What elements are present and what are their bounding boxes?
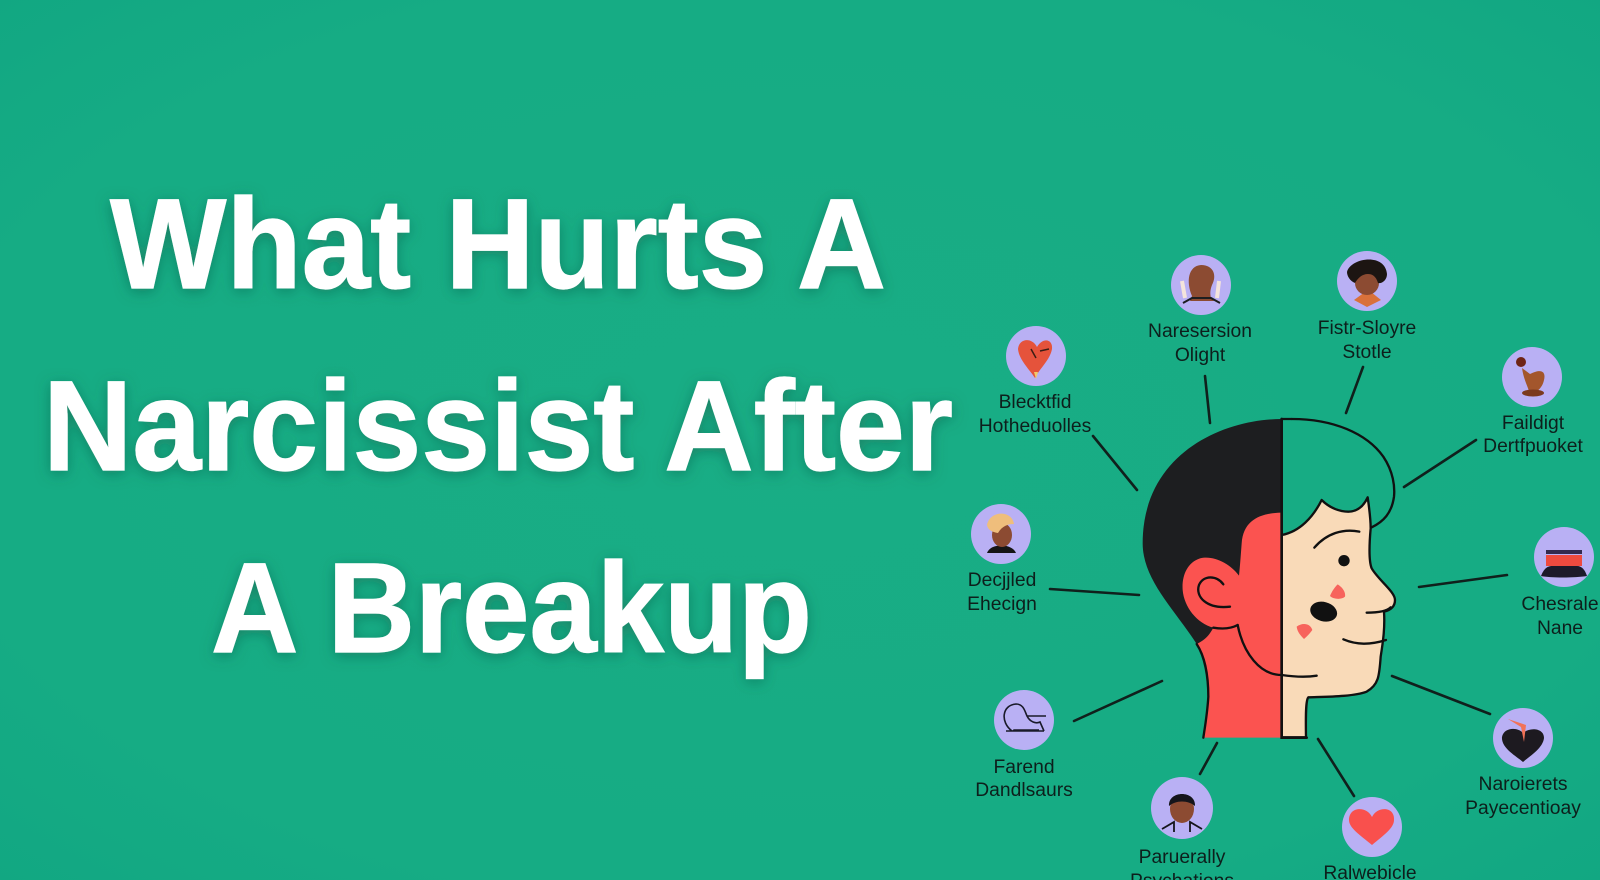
face, skin half	[1282, 497, 1395, 737]
node: Naresersion Olight: Olight	[1175, 345, 1226, 366]
title: What Hurts A	[110, 173, 886, 316]
node: Paruerally Psychations: Paruerally	[1139, 847, 1226, 868]
node: Paruerally Psychations	[1130, 777, 1234, 880]
node: Ralwebicle	[1323, 797, 1417, 880]
title: A Breakup	[211, 537, 812, 680]
cheek marks	[1297, 584, 1345, 639]
node: Decjjled Ehecign: Ehecign	[967, 594, 1037, 615]
head illustration	[1143, 419, 1395, 738]
node: Naroierets Payecentioay: Payecentioay	[1465, 798, 1581, 819]
node: Faildigt Dertfpuoket	[1483, 347, 1583, 457]
title	[43, 173, 953, 680]
node: Farend Dandlsaurs: Dandlsaurs	[975, 780, 1073, 801]
node: Fistr-Sloyre Stotle: Fistr-Sloyre	[1318, 318, 1416, 339]
node: Fistr-Sloyre Stotle	[1318, 251, 1416, 363]
face, red half	[1183, 513, 1281, 738]
face outlines and features	[1197, 419, 1394, 738]
node: Faildigt Dertfpuoket: Faildigt	[1502, 413, 1565, 434]
node: Blecktfid Hotheduolles: Hotheduolles	[979, 416, 1091, 437]
title: Narcissist After	[43, 355, 953, 498]
node: Decjjled Ehecign	[967, 504, 1037, 615]
node: Decjjled Ehecign: Decjjled	[968, 570, 1036, 591]
node: Faildigt Dertfpuoket: Dertfpuoket	[1483, 436, 1583, 457]
connector lines	[1050, 367, 1507, 796]
node: Naresersion Olight: Naresersion	[1148, 321, 1252, 342]
nose mark	[1308, 599, 1339, 625]
node: Naroierets Payecentioay	[1465, 708, 1581, 819]
node: Blecktfid Hotheduolles	[979, 326, 1091, 437]
node: Farend Dandlsaurs: Farend	[993, 757, 1055, 778]
node: Chesrale Nane	[1521, 527, 1599, 639]
hair, dark half	[1143, 419, 1282, 644]
node: Farend Dandlsaurs	[975, 690, 1073, 801]
eye	[1338, 555, 1350, 566]
node: Blecktfid Hotheduolles: Blecktfid	[999, 392, 1071, 413]
node: Naresersion Olight	[1148, 255, 1252, 366]
node: Chesrale Nane: Nane	[1537, 618, 1583, 639]
node: Naroierets Payecentioay: Naroierets	[1479, 774, 1567, 795]
node: Chesrale Nane: Chesrale	[1521, 594, 1599, 615]
node: Fistr-Sloyre Stotle: Stotle	[1342, 342, 1392, 363]
